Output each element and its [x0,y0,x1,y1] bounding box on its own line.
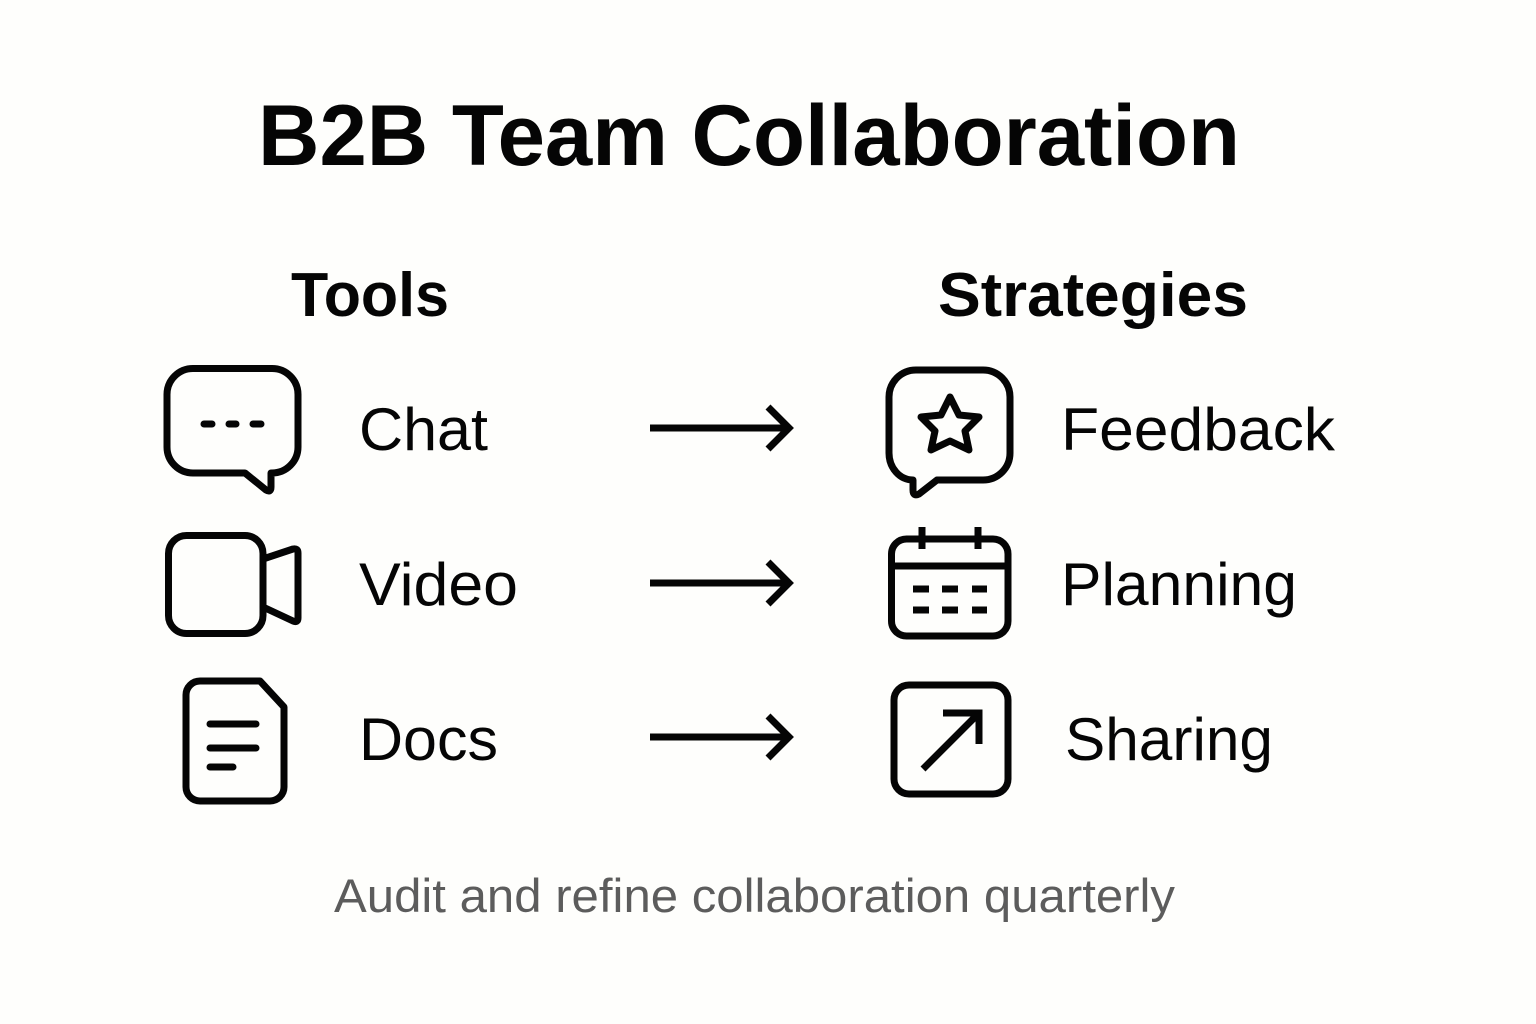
panel: tools column [167,261,518,801]
icon: chat bubble [167,368,298,491]
icon: calendar [891,527,1008,636]
icon: feedback bubble with star [889,370,1010,495]
label: Feedback: Feedback [1061,396,1336,463]
title: B2B Team Collaboration [258,88,1240,184]
heading: Tools: Tools [291,261,449,330]
arrow: docs to sharing [650,716,789,758]
footer note: Audit and refine collaboration quarterly [334,869,1176,922]
icon: document [186,681,284,801]
label: Docs: Docs [359,706,498,773]
arrow: chat to feedback [650,407,789,449]
label: Video: Video [359,551,518,618]
label: Sharing: Sharing [1065,706,1273,773]
panel: strategies column [889,261,1336,794]
label: Chat: Chat [359,396,488,463]
icon: video camera [168,536,298,634]
arrow: video to planning [650,562,789,604]
icon: share arrow in square [894,685,1008,794]
heading: Strategies: Strategies [938,261,1248,330]
label: Planning: Planning [1061,551,1297,618]
